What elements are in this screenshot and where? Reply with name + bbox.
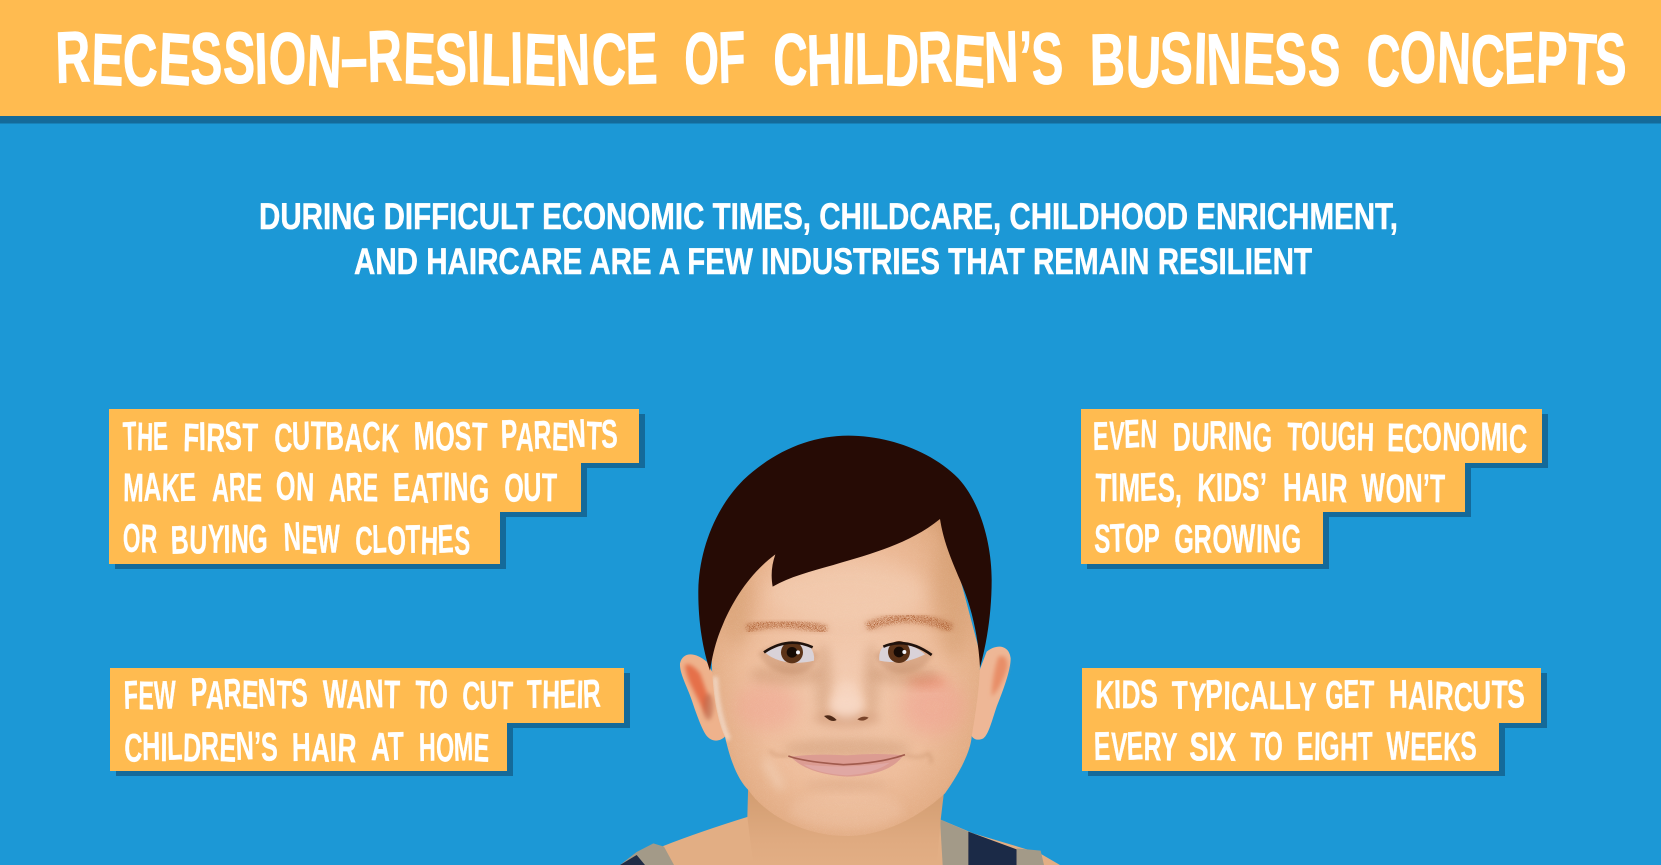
callout: hair keeps growing: EVEN <box>1092 412 1158 459</box>
right ear <box>970 647 1011 740</box>
callout: haircut frequency <box>1082 668 1547 776</box>
callout: first cutback: PARENTS <box>500 412 618 460</box>
intro text: AND HAIRCARE ARE A FEW INDUSTRIES THAT REMAIN RESILIENT <box>354 241 1312 282</box>
callout: home haircuts: THEIR <box>526 672 602 717</box>
intro text: DURING DIFFICULT ECONOMIC TIMES, CHILDCARE, CHILDHOOD ENRICHMENT, <box>259 196 1398 237</box>
callout: haircut frequency: EIGHT <box>1296 724 1373 769</box>
callout: haircut frequency: GET <box>1325 673 1375 718</box>
left eye <box>758 641 818 674</box>
callout: haircut frequency: TO <box>1250 725 1283 769</box>
title: CHILDREN’S <box>773 17 1065 103</box>
callout: home haircuts: CUT <box>462 673 514 719</box>
smile <box>770 750 931 777</box>
title <box>54 16 1628 103</box>
callout: haircut frequency: SIX <box>1189 725 1237 770</box>
callout: hair keeps growing: HAIR <box>1282 466 1349 511</box>
intro text <box>259 196 1398 282</box>
callout: first cutback: ARE <box>329 465 379 511</box>
callout: first cutback: CLOTHES <box>355 517 471 564</box>
title: CONCEPTS <box>1365 17 1628 102</box>
right eyebrow <box>867 618 952 628</box>
callout: first cutback: FIRST <box>183 414 259 461</box>
shoulders and shirt <box>620 817 1060 865</box>
callout: first cutback: OUT <box>504 466 558 511</box>
callout: hair keeps growing: GROWING <box>1174 517 1302 562</box>
callout: first cutback: ARE <box>212 465 263 511</box>
callout: first cutback: OR <box>122 517 158 562</box>
callout: home haircuts: PARENTS <box>190 670 308 718</box>
callout: first cutback: NEW <box>282 515 340 563</box>
callout: hair keeps growing: DURING <box>1172 414 1273 460</box>
callout: home haircuts <box>110 668 630 776</box>
title banner <box>0 0 1661 124</box>
title: RECESSION–RESILIENCE <box>54 16 658 103</box>
callout: hair keeps growing: TOUGH <box>1287 414 1375 460</box>
callout: home haircuts: CHILDREN’S <box>124 724 278 771</box>
callout: home haircuts: HAIR <box>291 726 358 771</box>
callout: home haircuts: WANT <box>322 672 401 718</box>
callout: hair keeps growing: TIMES, <box>1095 465 1182 511</box>
callout: hair keeps growing: KIDS’ <box>1197 465 1267 511</box>
callout: hair keeps growing: WON’T <box>1361 466 1446 511</box>
face <box>712 503 980 836</box>
facial shading <box>700 500 993 840</box>
callout: first cutback: ON <box>275 465 315 510</box>
callout: home haircuts: AT <box>371 725 404 770</box>
callout: hair keeps growing: ECONOMIC <box>1387 415 1528 462</box>
callout: haircut frequency: KIDS <box>1095 672 1158 718</box>
callout: first cutback: EATING <box>392 465 490 512</box>
callout: home haircuts: TO <box>415 673 448 717</box>
left eyebrow <box>747 623 827 631</box>
callout: first cutback: THE <box>122 415 168 460</box>
callout: haircut frequency: TYPICALLY <box>1171 672 1317 720</box>
nose <box>813 697 880 727</box>
illustration: smiling boy with cartoon hair <box>620 436 1060 865</box>
callout: hair keeps growing: STOP <box>1094 517 1160 562</box>
callout: haircut frequency: EVERY <box>1093 724 1178 770</box>
callout: haircut frequency: HAIRCUTS <box>1388 672 1525 720</box>
callout: home haircuts: FEW <box>123 674 176 718</box>
neck <box>747 780 945 865</box>
callout: first cutback: CUTBACK <box>274 414 401 461</box>
callout: hair keeps growing <box>1081 409 1548 569</box>
callout: haircut frequency: WEEKS <box>1386 724 1477 770</box>
callout: first cutback: MOST <box>413 414 488 460</box>
title: BUSINESS <box>1089 18 1343 103</box>
right eye <box>875 641 933 673</box>
left ear <box>680 654 728 741</box>
callout: home haircuts: HOME <box>418 725 490 771</box>
callout: first cutback: BUYING <box>170 517 268 563</box>
hair <box>698 436 992 671</box>
title: OF <box>684 17 747 100</box>
callout: first cutback <box>109 409 645 569</box>
callout: first cutback: MAKE <box>123 465 196 511</box>
